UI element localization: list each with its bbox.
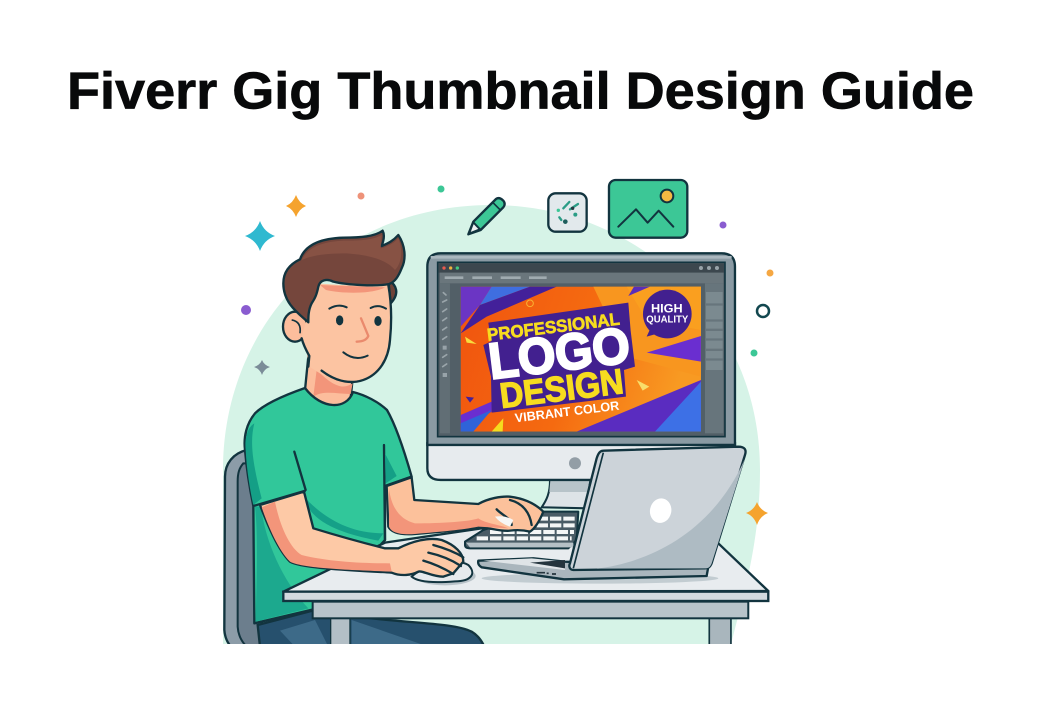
banner text: DESIGN [498, 362, 626, 416]
laptop base [478, 558, 708, 579]
monitor stand [542, 480, 590, 508]
desk [283, 528, 768, 647]
ear [283, 312, 307, 342]
monitor [427, 253, 735, 508]
face [302, 283, 391, 382]
illustration: designer at desk [223, 180, 774, 647]
chair [224, 450, 262, 647]
icon: image card [609, 180, 687, 238]
speech bubble: HIGH [651, 302, 683, 316]
banner text: PROFESSIONAL [486, 309, 621, 345]
banner [483, 303, 635, 413]
icon: splatter tile [548, 193, 587, 232]
banner text: LOGO [485, 316, 633, 390]
face outline [302, 285, 391, 382]
icon: sparkles and dots [241, 186, 774, 525]
banner text: VIBRANT COLOR [514, 399, 620, 425]
keyboard [465, 512, 578, 548]
laptop logo [648, 496, 674, 525]
title: Fiverr Gig Thumbnail Design Guide [67, 62, 974, 120]
person [260, 231, 543, 577]
eyebrows [329, 306, 386, 309]
far arm and hand [387, 477, 543, 534]
icon: pencil [468, 198, 505, 234]
shirt [245, 388, 412, 623]
nose [357, 318, 368, 342]
monitor bezel [427, 253, 735, 445]
banner text [487, 313, 629, 422]
neck [305, 357, 353, 407]
mouse [412, 562, 476, 585]
smile [343, 352, 368, 358]
monitor chin [427, 443, 735, 480]
trousers [258, 610, 484, 647]
desk legs [331, 617, 350, 647]
eyes [336, 315, 343, 325]
hair [283, 231, 405, 322]
speech bubble [643, 290, 692, 338]
far hair [388, 280, 396, 303]
thumbnail artwork [461, 287, 701, 432]
head [283, 231, 405, 382]
app window [438, 262, 725, 437]
laptop [478, 447, 746, 584]
speech bubble: QUALITY [646, 315, 689, 326]
near arm and hand [260, 492, 463, 577]
laptop lid [569, 447, 746, 570]
desk apron [313, 602, 748, 618]
desk top [283, 528, 768, 592]
mint background circle [223, 205, 760, 644]
